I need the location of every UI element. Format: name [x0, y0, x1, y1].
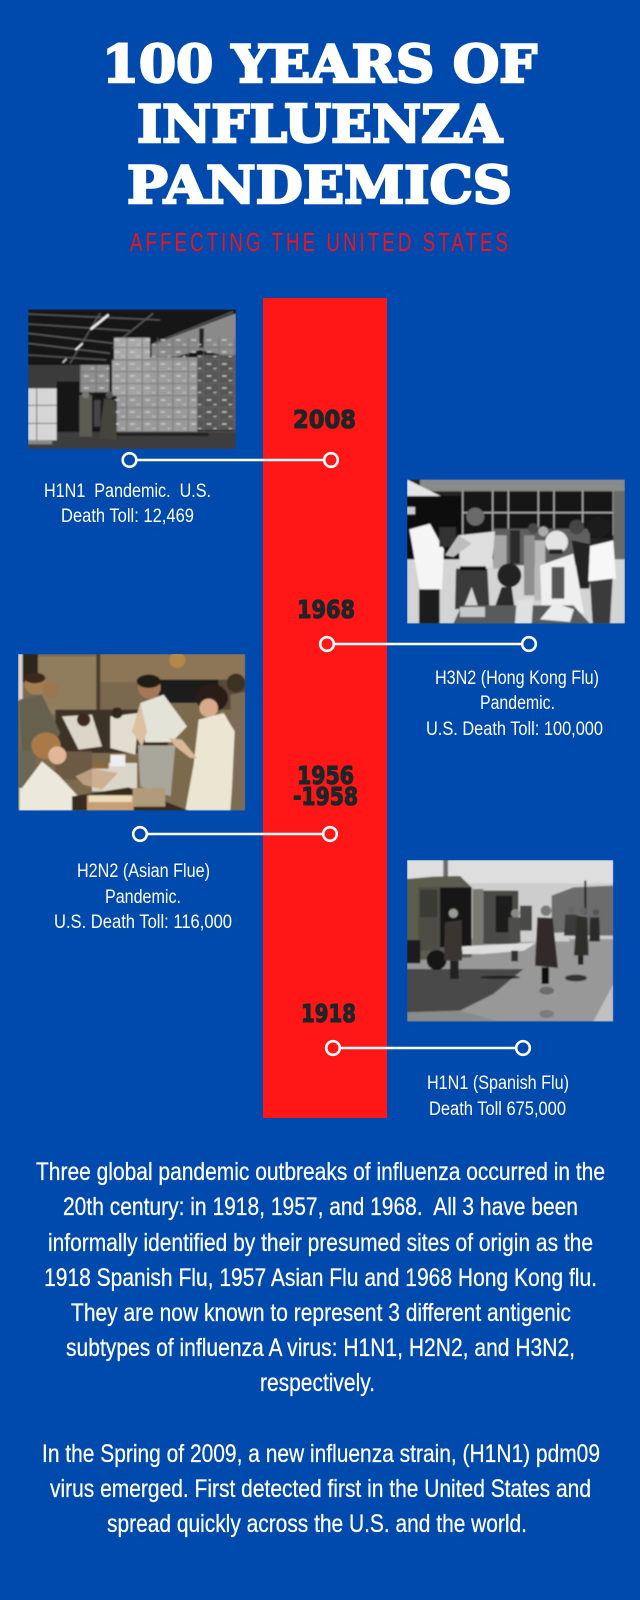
- year label: 1968: [297, 595, 355, 624]
- photo: vaccination line: [407, 479, 625, 624]
- year label: [293, 761, 358, 811]
- timeline entry: 1968: [297, 479, 625, 740]
- timeline entry: 1918: [301, 860, 613, 1120]
- caption: Death Toll 675,000: [429, 1099, 566, 1120]
- title: 100 YEARS OF: [102, 35, 537, 95]
- body text: 20th century pandemics: [36, 1158, 605, 1397]
- title: INFLUENZA: [137, 95, 503, 155]
- body text: 2009 strain: spread quickly across the U.S. and the world.: [107, 1510, 527, 1538]
- connector: [320, 637, 536, 651]
- photo: warehouse of vaccine boxes: [28, 309, 236, 449]
- caption: H1N1 Pandemic. U.S.: [44, 481, 211, 502]
- photo: nurses with ambulances: [407, 860, 613, 1022]
- caption: U.S. Death Toll: 100,000: [426, 719, 603, 740]
- year label: 2008: [293, 405, 356, 434]
- year label: 1918: [301, 999, 356, 1028]
- caption: Death Toll: 12,469: [61, 506, 194, 527]
- photo: vaccination table, colour: [18, 652, 245, 811]
- body text: 20th century pandemics: respectively.: [260, 1369, 375, 1397]
- timeline bar: [263, 298, 387, 1118]
- caption: [54, 861, 232, 933]
- year label: -1958: [293, 782, 358, 811]
- caption: U.S. Death Toll: 116,000: [54, 912, 232, 933]
- connector: [326, 1041, 530, 1055]
- timeline entry: 1956-1958: [18, 652, 358, 933]
- connector: [123, 453, 338, 467]
- body text: 2009 strain: [42, 1440, 600, 1538]
- subtitle: AFFECTING THE UNITED STATES: [130, 227, 508, 257]
- caption: H1N1 (Spanish Flu): [427, 1073, 569, 1094]
- connector: [133, 827, 337, 841]
- title: [102, 35, 537, 216]
- caption: [427, 1073, 569, 1120]
- caption: [426, 668, 603, 740]
- caption: Pandemic.: [105, 887, 181, 908]
- caption: H3N2 (Hong Kong Flu): [435, 668, 599, 689]
- caption: [44, 481, 211, 527]
- caption: H2N2 (Asian Flue): [77, 861, 210, 882]
- caption: Pandemic.: [480, 693, 555, 714]
- title: PANDEMICS: [127, 156, 512, 216]
- timeline entry: 2008: [28, 309, 356, 527]
- year label: 1956: [297, 761, 354, 790]
